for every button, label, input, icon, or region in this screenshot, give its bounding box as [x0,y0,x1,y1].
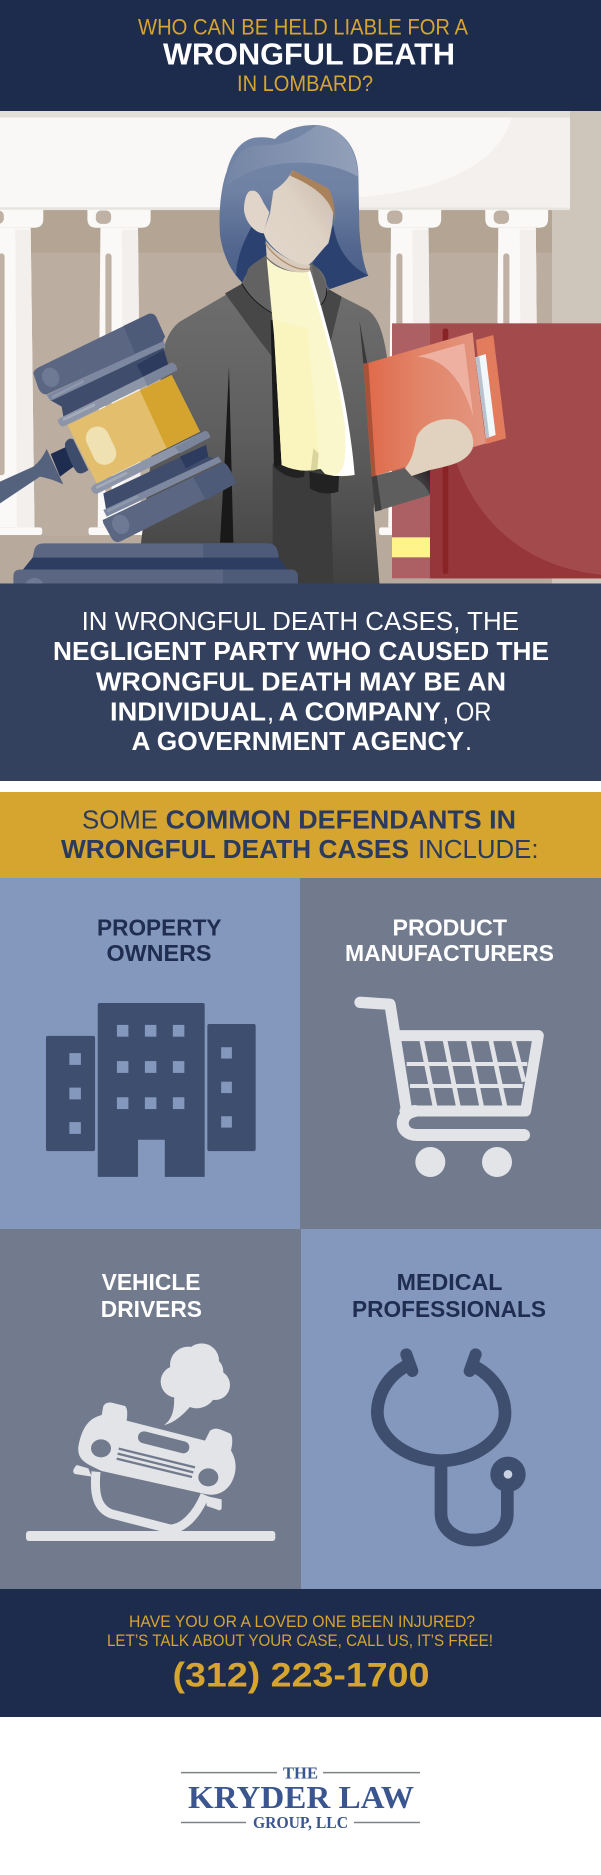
yellow scarf [267,258,355,476]
panel: header title [0,0,601,111]
logo: The Kryder Law Group [181,1764,420,1832]
panel: call to action [0,1589,601,1717]
heading line 1: SOME [82,806,158,834]
text line 1: IN WRONGFUL DEATH CASES, THE [82,608,519,636]
heading line: in Lombard: IN LOMBARD? [237,71,373,96]
label: product manufacturers [345,915,554,966]
panel: intro statement [0,584,601,781]
sleeve, orange folder and hand [363,332,506,512]
red book [392,323,601,578]
icon: shopping cart [360,1002,538,1177]
panel: product manufacturers [300,878,601,1229]
robe lower panels and shadows [220,320,367,583]
text line 4: INDIVIDUAL [110,699,266,727]
CTA text line 1: HAVE YOU OR A LOVED ONE BEEN INJURED? [129,1612,475,1631]
heading line 2: WRONGFUL DEATH CASES [61,836,409,864]
label: vehicle drivers: DRIVERS [101,1296,202,1322]
text line 4: A COMPANY [279,699,441,727]
robe folds and lapels [225,255,342,357]
judge figure [141,125,388,584]
CTA text line 2: LET’S TALK ABOUT YOUR CASE, CALL US, IT’S FREE! [107,1631,493,1650]
heading line 2: INCLUDE: [418,836,538,864]
heading line 1: COMMON DEFENDANTS IN [166,806,516,834]
courthouse background [0,111,601,584]
columns [0,210,548,535]
label: property owners: PROPERTY [97,915,222,941]
gavel sound block [13,543,298,584]
panel: property owners [0,878,300,1229]
panel: defendants heading band [0,792,601,878]
heading line: wrongful death: WRONGFUL DEATH [163,37,455,71]
robe [141,256,388,584]
text line 3: WRONGFUL DEATH MAY BE AN [96,668,506,696]
label: product manufacturers: MANUFACTURERS [345,940,554,966]
text line 5: A GOVERNMENT AGENCY [132,728,464,756]
illustration: judge with gavel and book in courthouse [0,111,601,597]
icon: stethoscope [377,1354,526,1540]
label: vehicle drivers: VEHICLE [102,1269,200,1295]
logo: The Kryder Law Group: GROUP, LLC [253,1813,348,1832]
logo: The Kryder Law Group: KRYDER LAW [188,1779,414,1815]
gavel [0,314,236,542]
logo: The Kryder Law Group: THE [283,1764,318,1782]
panel: vehicle drivers [0,1229,301,1589]
text line 4: , OR [442,699,492,727]
label: property owners [97,915,222,966]
text line 2: NEGLIGENT PARTY WHO CAUSED THE [53,638,549,666]
label: vehicle drivers [101,1269,202,1322]
panel: medical professionals [301,1229,601,1589]
heading line: who can be held liable: WHO CAN BE HELD LIABLE FOR A [138,14,468,39]
hair [220,125,368,289]
label: medical professionals: MEDICAL [397,1269,503,1295]
label: medical professionals: PROFESSIONALS [352,1296,546,1322]
label: medical professionals [352,1269,546,1322]
icon: overturned car with smoke [26,1343,275,1541]
text line 4: , [267,699,274,727]
icon: office buildings [46,1003,256,1177]
text line 5: . [465,728,472,756]
label: product manufacturers: PRODUCT [392,915,507,941]
label: property owners: OWNERS [106,940,212,966]
face, ear and neck [244,170,335,273]
phone number: (312) 223-1700 [172,1657,430,1695]
